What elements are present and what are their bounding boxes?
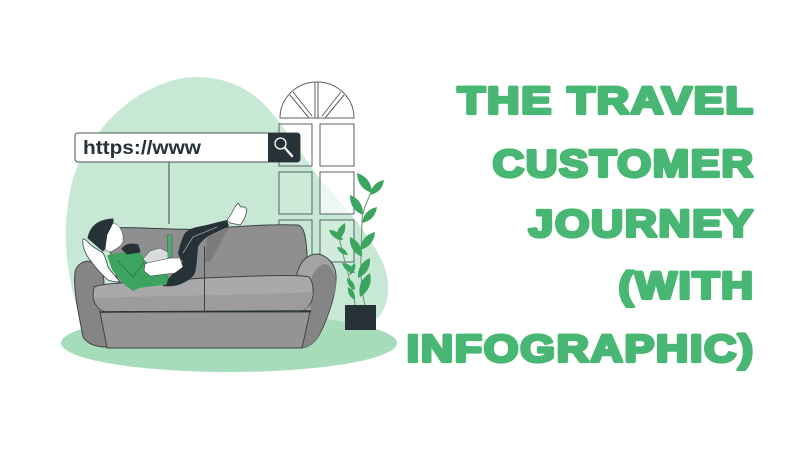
leg shadow on sofa — [205, 227, 229, 262]
left arm — [75, 261, 107, 347]
right arm — [297, 254, 336, 348]
torso — [108, 253, 168, 290]
title: (WITH — [619, 265, 755, 307]
sofa base — [100, 312, 310, 348]
hands and keyboard — [143, 248, 170, 263]
sofa — [75, 225, 336, 348]
ground ellipse — [61, 314, 397, 372]
seat cushions — [93, 275, 313, 312]
hair — [88, 219, 113, 251]
title: CUSTOMER — [493, 143, 755, 185]
window — [279, 82, 354, 262]
leg stripe — [183, 227, 217, 253]
plant — [329, 173, 384, 305]
icon: magnifier button — [268, 133, 300, 162]
legs — [163, 220, 229, 286]
seat divider — [204, 246, 206, 312]
title: INFOGRAPHIC) — [407, 328, 755, 370]
face — [105, 223, 123, 252]
sofa back — [104, 225, 308, 290]
title: JOURNEY — [529, 203, 755, 245]
title — [407, 80, 755, 370]
dark collar — [122, 244, 140, 254]
back pillow — [83, 239, 120, 282]
feet — [227, 203, 247, 225]
background blob — [66, 77, 388, 340]
title: THE TRAVEL — [458, 80, 755, 122]
search bar — [75, 133, 300, 224]
sleeve crease — [117, 260, 144, 277]
url text: https://www — [83, 137, 202, 159]
person — [83, 203, 247, 290]
lap pillow — [144, 258, 183, 276]
plant pot — [345, 305, 376, 330]
laptop — [167, 235, 172, 258]
